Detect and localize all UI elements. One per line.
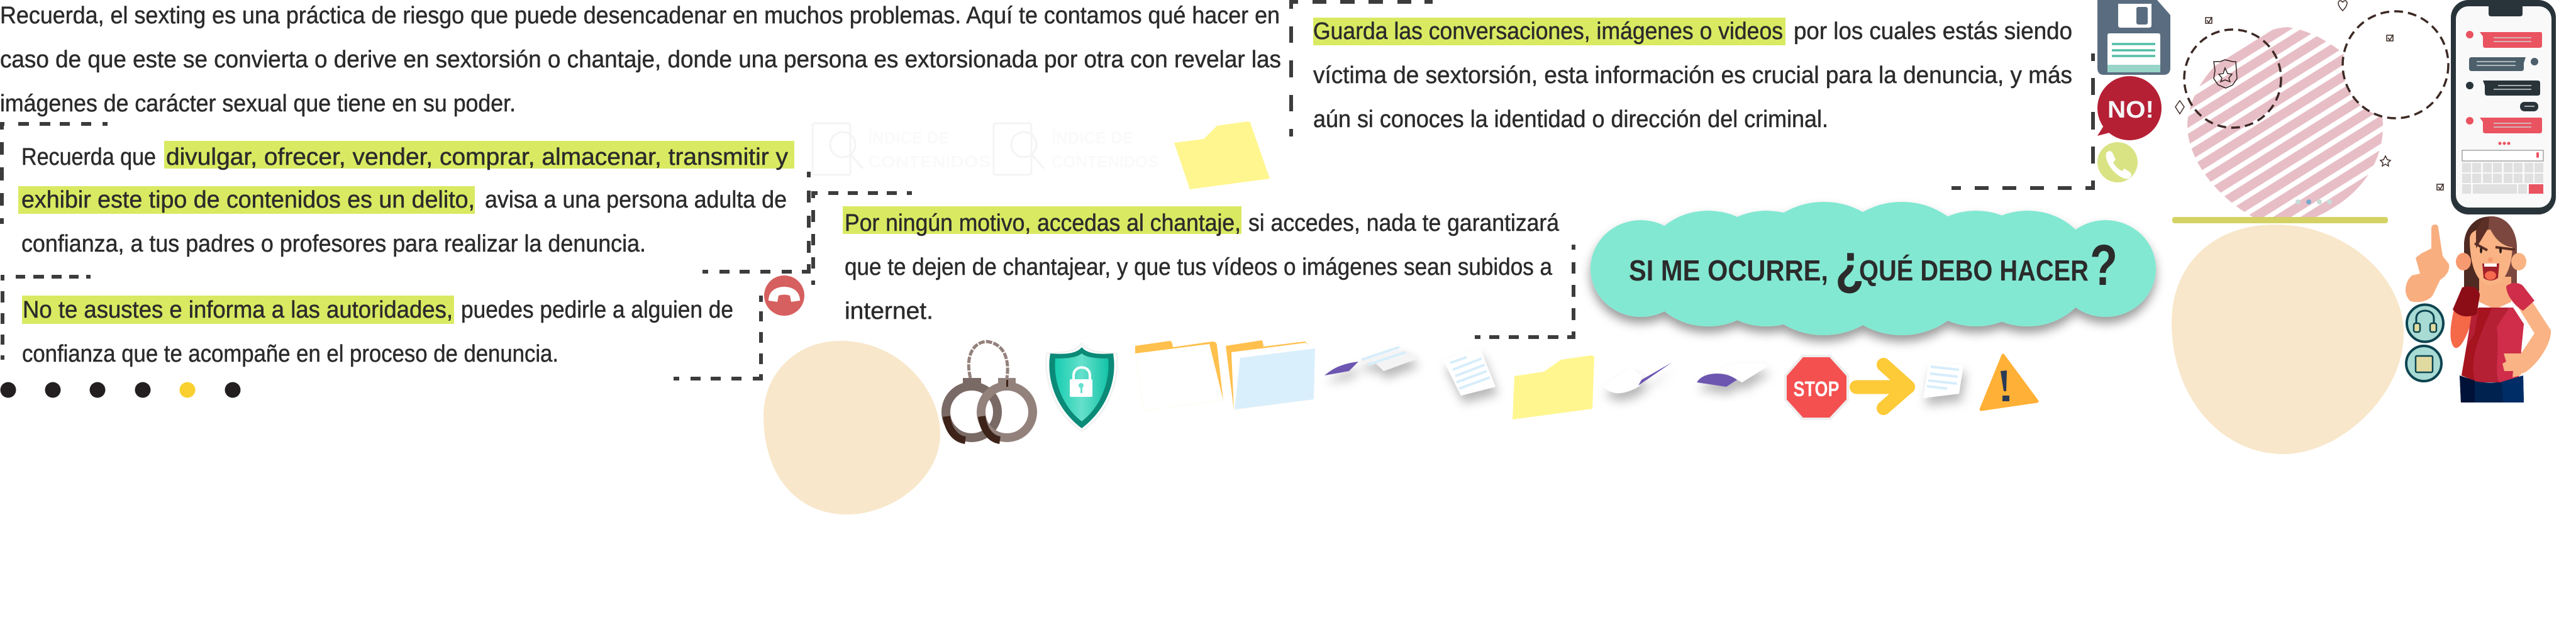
intro text block: caso de que este se convierta o derive en sextorsión o chantaje, donde una persona es extorsionada por otra con revelar las [0, 47, 1281, 73]
heading cloud: SI ME OCURRE, [1629, 254, 1828, 287]
carousel dots [2296, 199, 2332, 204]
panel: delito callout: divulgar, ofrecer, vender, comprar, almacenar, transmitir y [166, 144, 788, 170]
icon: stop sign [1785, 356, 1848, 419]
icon: document one [1443, 348, 1496, 396]
panel: guarda callout: por los cuales estás siendo [1794, 18, 2072, 45]
icon: no speech bubble [2097, 76, 2162, 140]
dashed circle right [2343, 11, 2448, 118]
icon: red hang-up phone [764, 275, 804, 316]
faint index labels: CONTENIDOS [1052, 152, 1158, 171]
icon: headphones badge [2407, 304, 2443, 342]
icon: police badge [2214, 60, 2237, 88]
icon: tablet badge [2406, 346, 2441, 381]
intro text block: imágenes de carácter sexual que tiene en su poder. [0, 91, 516, 117]
panel: guarda callout: Guarda las conversaciones, imágenes o videos [1313, 18, 1783, 45]
panel: chantaje callout: si accedes, nada te garantizará [1248, 210, 1560, 236]
panel: chantaje callout [813, 193, 1574, 337]
small doodle icons [2175, 1, 2443, 190]
panel: delito callout [2, 124, 809, 272]
icon: curled paper three [1697, 363, 1768, 387]
faint index labels: ÍNDICE DE [1052, 128, 1133, 147]
arrow: yellow [1857, 365, 1908, 408]
panel: guarda callout: aún si conoces la identidad o dirección del criminal. [1313, 106, 1828, 133]
illustration: angry woman pointing [2406, 216, 2551, 402]
icon: no speech bubble: NO! [2107, 97, 2154, 123]
icon: stop sign: STOP [1794, 377, 1839, 401]
panel: delito callout: Recuerda que [21, 144, 156, 170]
heading cloud: ¿ [1835, 232, 1864, 296]
panel: autoridades callout: No te asustes e informa a las autoridades, [23, 297, 453, 323]
icon: floppy disk [2097, 0, 2170, 75]
panel: guarda callout: víctima de sextorsión, esta información es crucial para la denuncia, y más [1313, 62, 2072, 89]
phone mockup with chat [2451, 0, 2556, 214]
icon: yellow folder bottom [1513, 355, 1594, 419]
icon: curled paper two [1603, 362, 1672, 393]
icon: faint index books [813, 123, 1044, 175]
pagination dots [0, 382, 240, 397]
icon: curled paper one [1324, 347, 1416, 375]
panel: autoridades callout [3, 277, 761, 379]
faint index labels: ÍNDICE DE [868, 128, 950, 147]
faint index labels: CONTENIDOS [868, 152, 991, 171]
icon: orange folder with white page [1135, 341, 1223, 411]
intro text block: Recuerda, el sexting es una práctica de riesgo que puede desencadenar en muchos problemas. Aquí te contamos qué hacer en [0, 3, 1280, 29]
icon: document two [1923, 363, 1963, 398]
heading cloud: ? [2090, 233, 2118, 297]
dashed circle left [2184, 30, 2281, 128]
icon: green phone [2097, 142, 2138, 182]
olive bar [2172, 217, 2388, 223]
heading cloud [1591, 202, 2156, 335]
panel: delito callout: avisa a una persona adulta de [485, 187, 787, 213]
icon: yellow folder top [1174, 121, 1270, 189]
heading cloud: QUÉ DEBO HACER [1859, 254, 2089, 287]
panel: chantaje callout: que te dejen de chantajear, y que tus vídeos o imágenes sean subidos a [845, 254, 1553, 280]
intro text block [0, 3, 1281, 117]
decorative egg right [2172, 225, 2404, 454]
panel: chantaje callout: Por ningún motivo, accedas al chantaje, [845, 210, 1241, 236]
panel: autoridades callout: puedes pedirle a alguien de [461, 297, 733, 323]
decorative egg left [763, 341, 940, 514]
panel: autoridades callout: confianza que te acompañe en el proceso de denuncia. [22, 341, 558, 367]
panel: guarda callout [1291, 2, 2093, 188]
icon: security shield [1046, 343, 1118, 431]
panel: chantaje callout: internet. [845, 298, 933, 325]
icon: warning triangle [1981, 355, 2037, 409]
icon: orange folder with blue page [1226, 340, 1315, 410]
panel: delito callout: exhibir este tipo de contenidos es un delito, [21, 187, 475, 213]
faint index labels [868, 128, 1158, 171]
striped pink blob [2187, 27, 2383, 217]
icon: handcuffs [946, 341, 1033, 440]
panel: delito callout: confianza, a tus padres o profesores para realizar la denuncia. [21, 231, 646, 257]
